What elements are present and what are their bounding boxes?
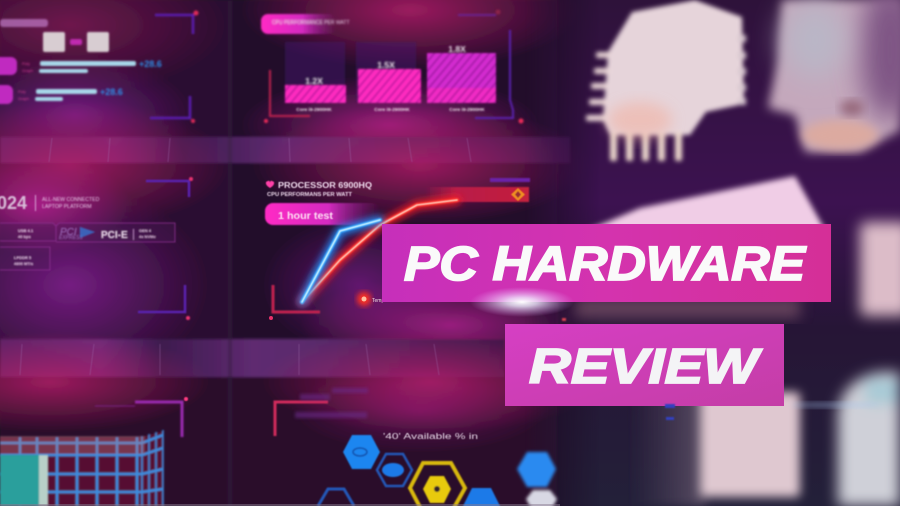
bottom edge line xyxy=(0,504,560,506)
bars xyxy=(285,53,496,103)
labels: Poly xyxy=(22,61,30,66)
panel: middle-left panel background xyxy=(0,100,230,385)
bar captions: Core i9-2900HK xyxy=(374,107,410,113)
bar values: 1.2X xyxy=(305,76,323,86)
spec chips: 4x NVMe xyxy=(139,234,156,239)
values: +28.6 xyxy=(100,87,123,97)
connector xyxy=(70,39,82,45)
panel: processor line chart xyxy=(265,180,530,320)
floor strip row two xyxy=(0,339,505,377)
chip icons xyxy=(43,32,109,52)
spec chips: 40 bps xyxy=(18,234,31,239)
panel: top-middle panel background xyxy=(232,0,580,175)
icon: blurred CPU chip xyxy=(586,0,746,161)
panel: hexagon map xyxy=(275,388,557,506)
small flare marks xyxy=(562,318,675,420)
blurred hexagons xyxy=(517,452,557,506)
teal block xyxy=(0,455,48,506)
frame xyxy=(270,15,513,118)
bar captions: Core i9-2900HK xyxy=(449,107,485,113)
lens flare xyxy=(470,287,574,317)
right side dark background xyxy=(500,0,900,506)
headline: LAPTOP PLATFORM xyxy=(42,204,92,210)
spec chips: PCI xyxy=(60,227,77,238)
corner mark xyxy=(184,397,188,401)
banner: PC HARDWARE: PC HARDWARE xyxy=(404,238,807,291)
time pill: 1 hour test xyxy=(278,211,334,222)
blue curve xyxy=(302,220,380,302)
legend dot: Temp xyxy=(372,298,384,304)
caption: '40' Available % in xyxy=(383,432,478,441)
panel: performance bar chart xyxy=(261,10,524,124)
heart icon xyxy=(266,181,274,188)
smear marks xyxy=(295,388,368,418)
frame xyxy=(138,181,189,312)
bar values xyxy=(305,44,466,86)
panel: bottom-left panel background xyxy=(0,332,228,506)
spec chips: LPDDR 5 xyxy=(14,255,32,260)
red tag xyxy=(425,187,529,202)
labels: Graph xyxy=(18,96,29,101)
bar tracks xyxy=(285,42,416,102)
bar values: 1.5X xyxy=(377,60,395,70)
bar captions xyxy=(296,107,485,113)
red curve xyxy=(302,200,457,302)
headline xyxy=(0,193,100,213)
wireframe grid xyxy=(0,430,163,506)
header pill xyxy=(261,14,350,34)
vertical divider xyxy=(228,0,232,506)
panel: connected laptop platform xyxy=(0,177,193,320)
labels xyxy=(18,61,33,101)
panel backgrounds xyxy=(0,0,600,506)
time pill xyxy=(265,203,380,225)
header pill: CPU PERFORMANCE PER WATT xyxy=(272,20,350,26)
spec chips: GEN 4 xyxy=(139,228,152,233)
frame xyxy=(275,402,328,436)
blurred block right xyxy=(860,222,900,316)
blurred block bottom xyxy=(630,390,800,506)
labels: Poly xyxy=(18,89,26,94)
banner: REVIEW xyxy=(505,324,784,406)
panel: wireframe surface xyxy=(0,397,188,506)
panel: top-left panel background xyxy=(0,0,230,175)
corner marks xyxy=(186,177,193,320)
corner dots xyxy=(264,10,524,124)
corner dots xyxy=(191,10,198,123)
legend dot xyxy=(357,292,384,306)
spec chips xyxy=(0,223,175,270)
panel: dual bar comparison xyxy=(0,10,198,123)
bars xyxy=(35,61,136,101)
headline: ALL-NEW CONNECTED xyxy=(42,197,100,203)
values: +28.6 xyxy=(139,59,162,69)
chart title: PROCESSOR 6900HQ xyxy=(278,181,372,190)
blurred component centre xyxy=(588,176,825,240)
blurred cylinder bottom right xyxy=(838,372,900,506)
spec chips: 4800 MT/s xyxy=(14,261,34,266)
banner: REVIEW: REVIEW xyxy=(529,340,762,394)
bar values: 1.8X xyxy=(448,44,466,54)
labels: Graph xyxy=(22,68,33,73)
blurred component top right xyxy=(768,0,900,152)
blurred strip under banner xyxy=(575,298,800,318)
spec chips: EXPRESS xyxy=(59,235,83,241)
panel: middle-centre panel background xyxy=(232,105,600,375)
blue streak flare xyxy=(790,402,880,408)
frame xyxy=(273,180,530,312)
values xyxy=(100,59,162,97)
frame xyxy=(150,15,193,118)
row badges xyxy=(0,57,17,104)
floor grid lines xyxy=(20,138,471,375)
corner mark xyxy=(269,316,273,320)
icon: warning diamond xyxy=(511,188,525,201)
chart subtitle: CPU PERFORMANS PER WATT xyxy=(267,192,352,198)
spec chips: PCI-E xyxy=(101,230,128,241)
bar captions: Core i9-2900HK xyxy=(296,107,332,113)
frame xyxy=(95,402,182,437)
floor strip row one xyxy=(0,137,570,163)
heading smear xyxy=(0,19,48,27)
banner: PC HARDWARE xyxy=(382,224,831,302)
hexagons xyxy=(318,435,500,506)
panel: bottom-centre panel background xyxy=(232,330,600,506)
spec chips: USB 4.1 xyxy=(18,228,34,233)
